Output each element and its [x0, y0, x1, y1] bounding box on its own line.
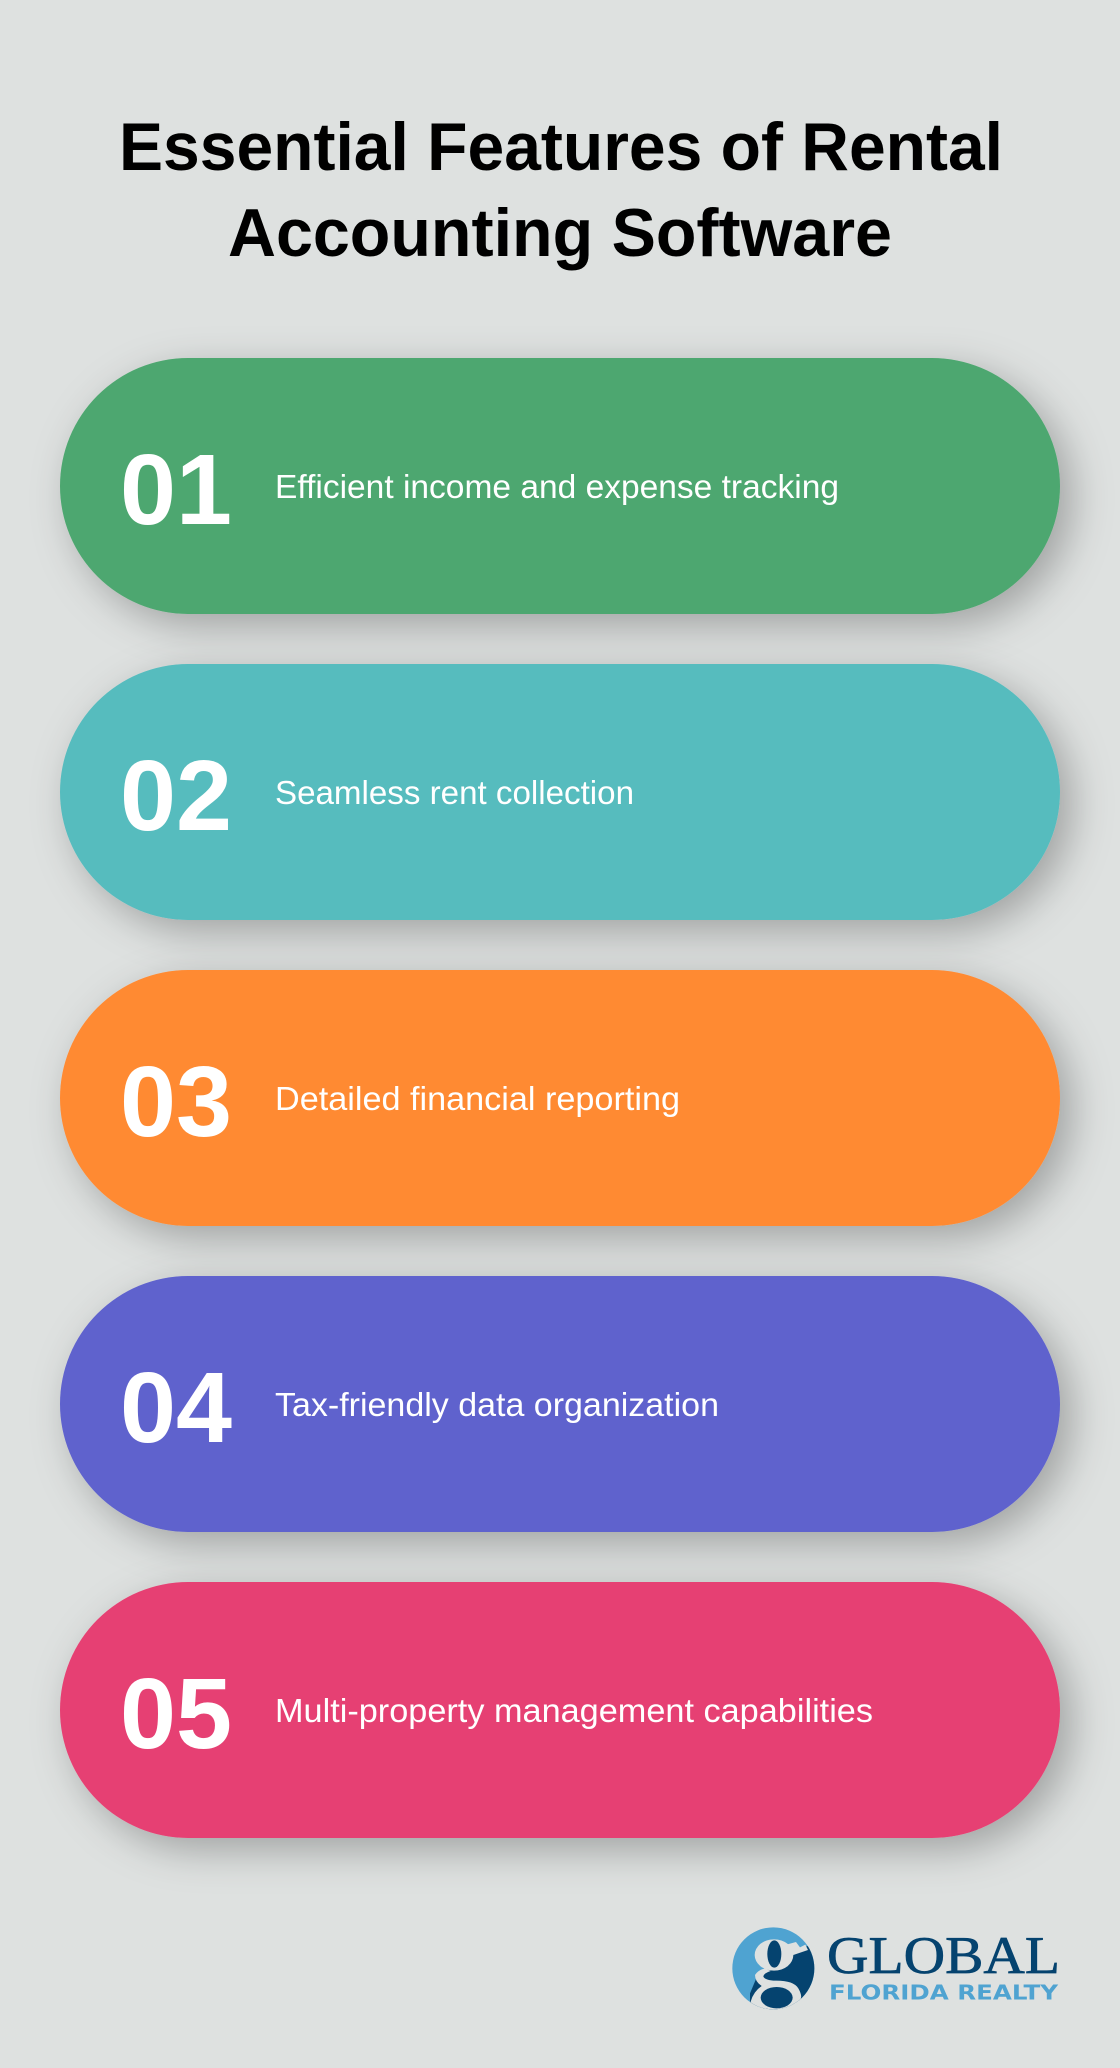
panel: feature 03 — [60, 970, 1060, 1226]
title — [119, 109, 1003, 271]
panel: feature 01 — [60, 358, 1060, 614]
label 02: Seamless rent collection — [275, 774, 634, 811]
pill background 01 — [60, 358, 1060, 614]
title: Essential Features of Rental — [119, 109, 1003, 185]
pill background 03 — [60, 970, 1060, 1226]
wordmark: GLOBAL: GLOBAL — [827, 1927, 1060, 1985]
pill background 05 — [60, 1582, 1060, 1838]
panel: feature 02 — [60, 664, 1060, 920]
icon: g roundel — [732, 1927, 814, 2010]
label 04: Tax-friendly data organization — [275, 1386, 719, 1423]
panel: feature 05 — [60, 1582, 1060, 1838]
label 05: Multi-property management capabilities — [275, 1692, 873, 1729]
pill background 04 — [60, 1276, 1060, 1532]
number 04: 04 — [120, 1352, 232, 1464]
label 01: Efficient income and expense tracking — [275, 468, 839, 505]
number 03: 03 — [120, 1046, 232, 1158]
wordmark: FLORIDA REALTY: FLORIDA REALTY — [829, 1980, 1059, 2004]
label 03: Detailed financial reporting — [275, 1080, 680, 1117]
number 02: 02 — [120, 740, 232, 852]
number 01: 01 — [120, 434, 232, 546]
panel: feature 04 — [60, 1276, 1060, 1532]
title: Accounting Software — [228, 195, 892, 271]
number 05: 05 — [120, 1658, 232, 1770]
pill background 02 — [60, 664, 1060, 920]
logo: Global Florida Realty — [732, 1927, 1060, 2017]
